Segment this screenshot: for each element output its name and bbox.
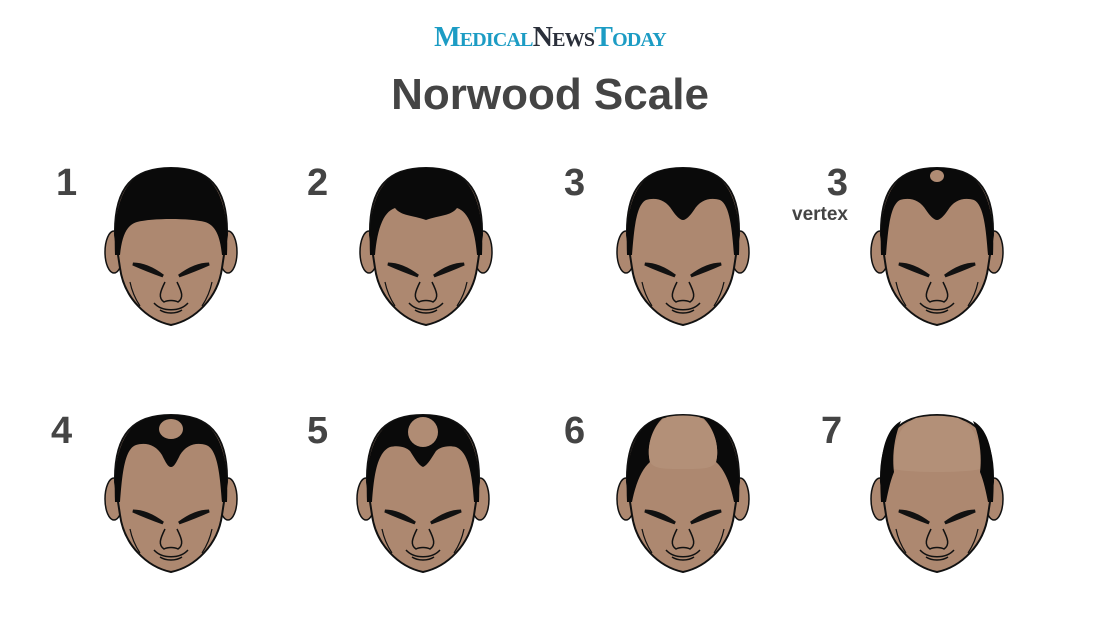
- label 3 vertex: 3: [827, 162, 848, 204]
- head 3: [617, 168, 749, 325]
- label 5: 5: [307, 410, 328, 452]
- label 3 vertex: [792, 162, 848, 225]
- label 4: 4: [51, 410, 72, 452]
- head 1: [105, 168, 237, 325]
- label 7: 7: [821, 410, 842, 452]
- head 2: [360, 168, 492, 325]
- head 6: [617, 415, 749, 572]
- title: Norwood Scale: [391, 70, 709, 119]
- head 7: [871, 415, 1003, 572]
- label 6: 6: [564, 410, 585, 452]
- head 4: [105, 415, 237, 572]
- label 1: 1: [56, 162, 77, 204]
- logo: MedicalNewsToday: [434, 22, 666, 53]
- label 3: 3: [564, 162, 585, 204]
- label 2: 2: [307, 162, 328, 204]
- label 3 vertex: vertex: [792, 204, 848, 225]
- head 5: [357, 415, 489, 572]
- head 3 vertex: [871, 168, 1003, 325]
